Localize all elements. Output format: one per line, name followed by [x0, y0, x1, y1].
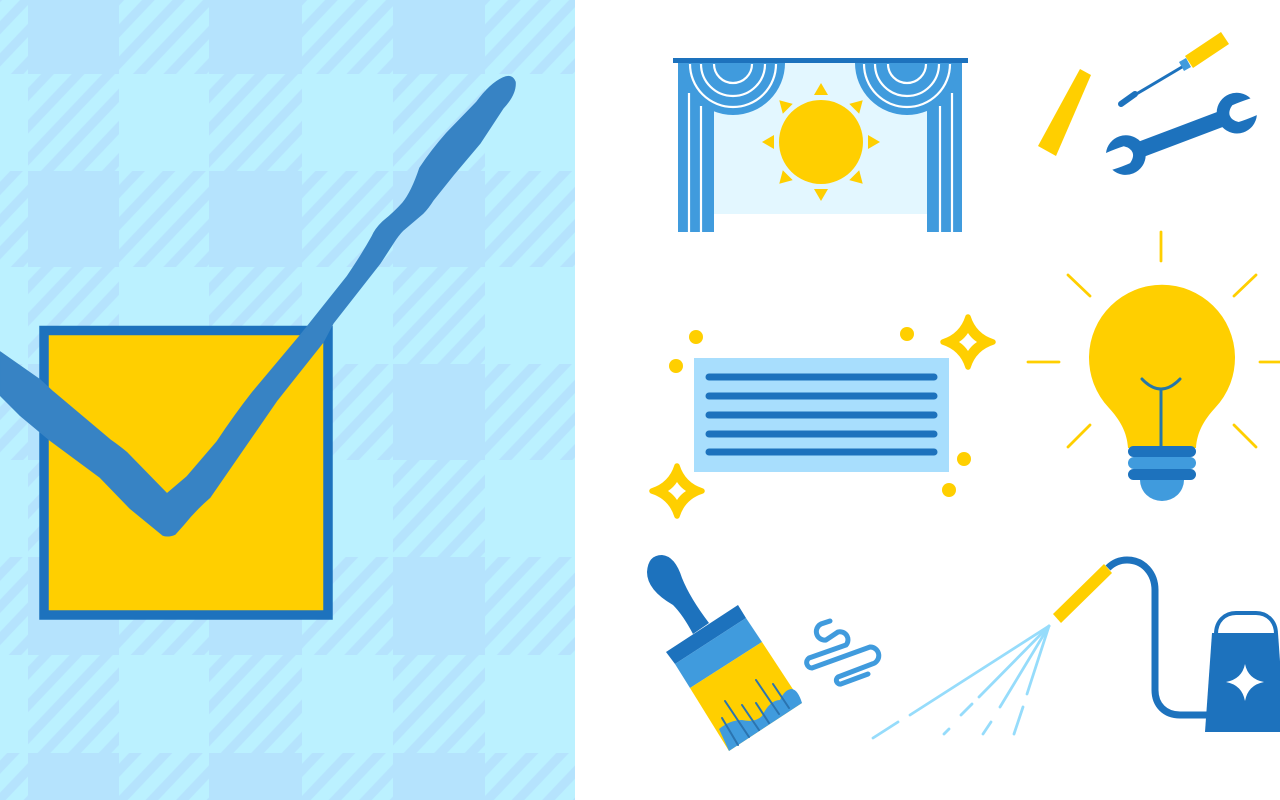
hose [1108, 560, 1207, 715]
bulb tip [1140, 478, 1184, 501]
icon: tools [1038, 32, 1261, 180]
vent body [694, 358, 949, 472]
water spray [873, 626, 1049, 738]
handle [647, 555, 709, 634]
sparkle: top right [943, 317, 993, 367]
yellow bar [1038, 69, 1091, 156]
sun [762, 83, 880, 201]
nozzle [1053, 564, 1112, 623]
base [1128, 446, 1196, 480]
rays [1028, 232, 1280, 447]
left curtain [678, 63, 785, 232]
paint squiggle [807, 621, 879, 684]
bristle lines [722, 680, 789, 745]
tank [1205, 633, 1280, 732]
bristles [690, 642, 802, 751]
icon: air vent with sparkles [652, 317, 993, 516]
icon: curtains with sun [673, 58, 968, 232]
icon: light bulb [1028, 232, 1280, 501]
vent slats [709, 377, 934, 452]
window [714, 63, 927, 214]
curtain rod [673, 58, 968, 63]
tank sparkle [1226, 664, 1264, 701]
glass [1089, 285, 1235, 448]
icon: pressure washer [873, 560, 1280, 738]
dots [669, 327, 971, 497]
check mark [0, 77, 515, 536]
filament [1142, 379, 1180, 446]
icon: paint brush [647, 555, 802, 751]
panel: checklist background [0, 0, 575, 800]
ferrule [666, 605, 746, 664]
checkbox [44, 330, 328, 615]
blue paint [719, 689, 802, 751]
sparkle: bottom left [652, 466, 702, 516]
tank handle [1216, 613, 1276, 634]
wrench [1102, 88, 1261, 180]
screwdriver [1121, 32, 1229, 104]
right curtain [855, 63, 962, 232]
